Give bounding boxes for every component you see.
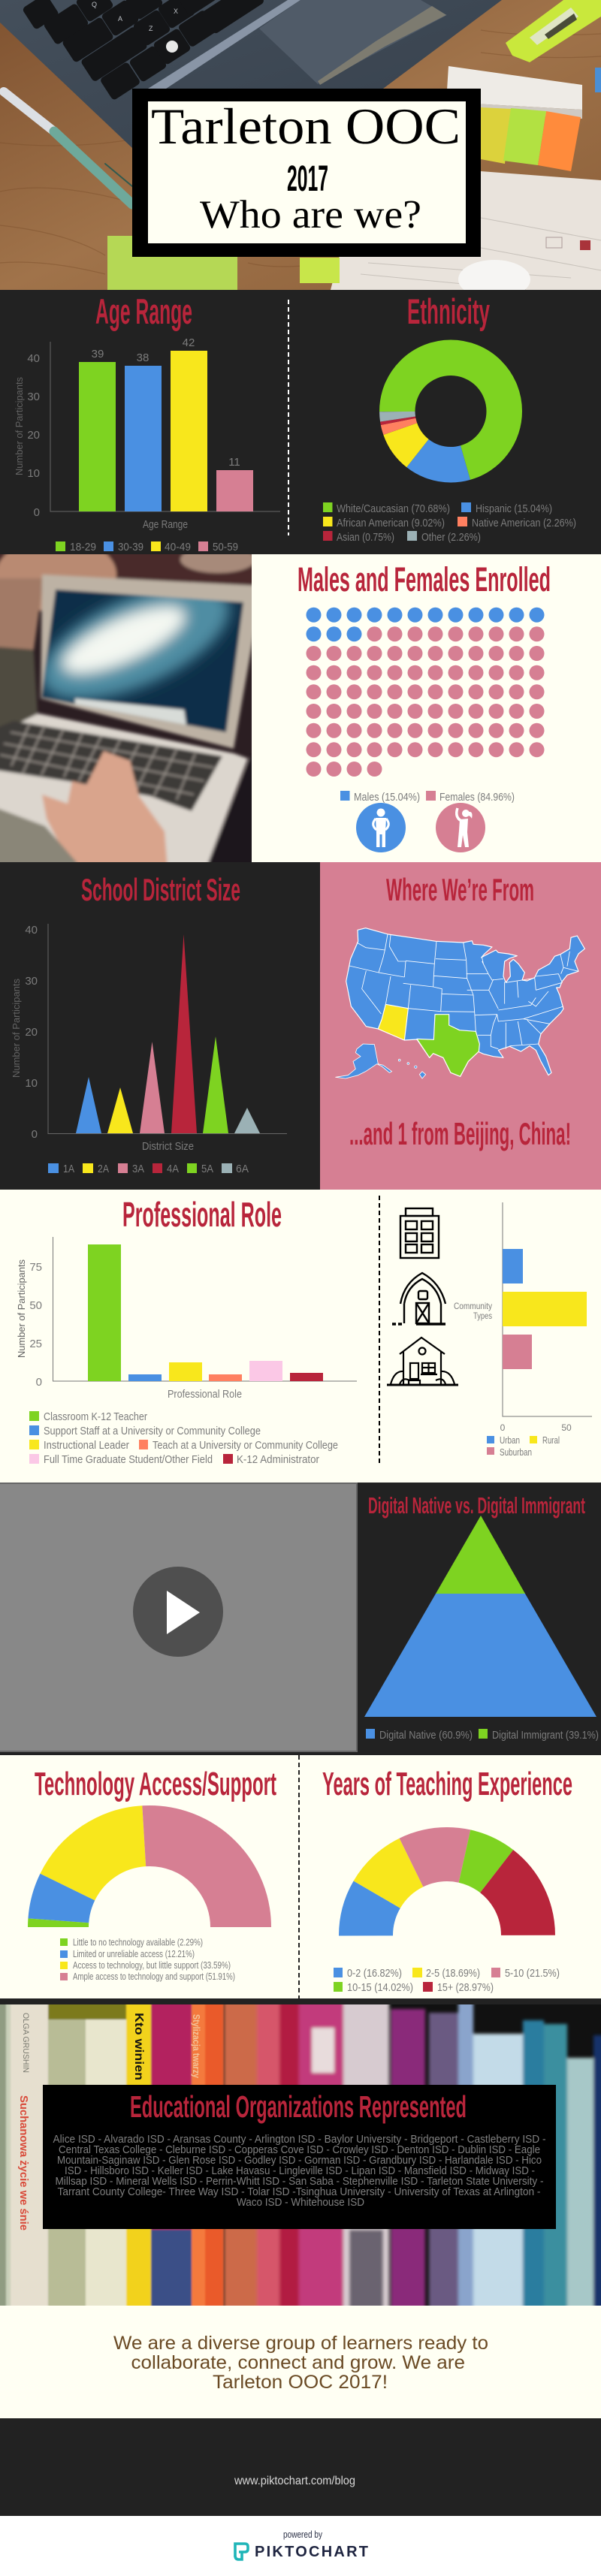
hero: pen bbox=[4, 92, 132, 204]
legend: gender: Females (84.96%) bbox=[439, 791, 515, 804]
legend: ethnicity: Other (2.26%) bbox=[421, 531, 481, 544]
organizations list bbox=[53, 2133, 545, 2209]
hero: notebook and mouse bbox=[331, 171, 601, 299]
panel: footer link bbox=[0, 2418, 601, 2516]
map: United States bbox=[336, 928, 584, 1078]
bar chart: professional role: Number of Participants bbox=[17, 1259, 27, 1358]
bar chart: age range: 20 bbox=[27, 429, 40, 442]
heading: age range: Age Range bbox=[95, 291, 192, 331]
bar chart: community types: Types bbox=[473, 1311, 492, 1321]
bar chart: age range: 40 bbox=[27, 352, 40, 365]
heading: school district size: School District Size bbox=[81, 872, 240, 907]
legend: technology access: Little to no technology available (2.29%) bbox=[73, 1938, 203, 1948]
spine text: OLGA GRUSHIN bbox=[21, 2013, 30, 2073]
legend: age range: 50-59 bbox=[213, 541, 238, 554]
panel: closing statement: Tarleton OOC 2017! bbox=[213, 2372, 388, 2393]
semi-donut: technology access bbox=[59, 1835, 240, 2019]
photo: hands on laptop bbox=[0, 554, 252, 862]
legend: ethnicity: Native American (2.26%) bbox=[472, 517, 576, 529]
legend: district size: 1A bbox=[63, 1163, 74, 1175]
legend: ethnicity: Hispanic (15.04%) bbox=[476, 502, 552, 515]
map: Hawaii bbox=[398, 1059, 426, 1078]
heading: technology access: Technology Access/Support bbox=[35, 1766, 276, 1802]
legend: years of teaching: 0-2 (16.82%) bbox=[347, 1967, 402, 1980]
bar chart: age range: Number of Participants bbox=[14, 377, 25, 475]
legend: years of teaching: 10-15 (14.02%) bbox=[347, 1981, 413, 1994]
map: Arizona bbox=[378, 1004, 408, 1040]
heading: ethnicity: Ethnicity bbox=[407, 291, 490, 331]
legend: professional role bbox=[29, 1410, 338, 1466]
triangle chart: district size: 10 bbox=[25, 1077, 38, 1090]
legend: digital native bbox=[366, 1729, 599, 1742]
dot matrix: gender split bbox=[307, 608, 544, 777]
subtitle: Who are we? bbox=[200, 193, 421, 237]
icon: rural barn bbox=[392, 1273, 445, 1324]
triangle chart: district size: District Size bbox=[142, 1140, 194, 1153]
bar chart: community types: Community bbox=[454, 1301, 492, 1311]
text panel: organizations list bbox=[43, 2085, 556, 2229]
panel: where we're from bbox=[320, 862, 601, 1190]
legend: ethnicity: Asian (0.75%) bbox=[337, 531, 394, 544]
legend: professional role: Teach at a University or Community College bbox=[153, 1439, 338, 1452]
legend: digital native: Digital Native (60.9%) bbox=[379, 1729, 473, 1742]
map: Alaska bbox=[336, 1044, 392, 1078]
icon: urban building bbox=[400, 1208, 439, 1258]
legend: age range bbox=[56, 541, 238, 554]
panel: professional role bbox=[0, 1190, 601, 1483]
legend: gender: Males (15.04%) bbox=[354, 791, 420, 804]
legend: age range: 18-29 bbox=[70, 541, 96, 554]
legend: district size: 4A bbox=[167, 1163, 179, 1175]
triangle chart: district size: 30 bbox=[25, 975, 38, 988]
organizations list: Waco ISD - Whitehouse ISD bbox=[237, 2196, 364, 2209]
hero: laptop: A bbox=[118, 15, 122, 23]
spine text: Suchanowa życie we śnie bbox=[17, 2095, 30, 2231]
hero: sticky tabs bbox=[446, 66, 582, 171]
legend: district size: 3A bbox=[132, 1163, 144, 1175]
icon: piktochart logo bbox=[235, 2544, 248, 2559]
organizations list: Millsap ISD - Mineral Wells ISD - Perrin-Whitt ISD - San Saba - Stephenville ISD - Tarleton State University - bbox=[56, 2175, 544, 2188]
spine text bbox=[17, 2013, 202, 2231]
organizations list: Mountain-Saginaw ISD - Glen Rose ISD - Godley ISD - Gorman ISD - Grandbury ISD - Harlandale ISD - Hico bbox=[57, 2154, 542, 2167]
triangle chart: district size: 0 bbox=[32, 1128, 38, 1141]
legend: community types: Suburban bbox=[500, 1447, 532, 1458]
title line: Tarleton OOC bbox=[151, 98, 461, 155]
bar chart: age range bbox=[14, 336, 280, 531]
legend: technology access: Ample access to technology and support (51.91%) bbox=[73, 1971, 235, 1982]
legend: ethnicity: African American (9.02%) bbox=[337, 517, 445, 529]
legend: community types bbox=[487, 1435, 560, 1458]
panel: school district size bbox=[0, 862, 320, 1190]
organizations list: Alice ISD - Alvarado ISD - Aransas County - Arlington ISD - Baylor University - Bridgeport - Castleberry ISD - bbox=[53, 2133, 545, 2146]
panel: technology and teaching experience bbox=[0, 1755, 601, 2019]
bar chart: age range: 11 bbox=[228, 456, 240, 469]
triangle chart: district size: 40 bbox=[25, 924, 38, 937]
legend: technology access bbox=[60, 1938, 235, 1982]
icon: play button bbox=[133, 1567, 223, 1657]
legend: district size: 5A bbox=[201, 1163, 213, 1175]
organizations list: ISD - Hillsboro ISD - Keller ISD - Lake Havasu - Lingleville ISD - Lipan ISD - Mansfield ISD - Midway ISD - bbox=[65, 2164, 535, 2177]
legend: ethnicity: White/Caucasian (70.68%) bbox=[337, 502, 450, 515]
bar chart: professional role: Professional Role bbox=[168, 1388, 242, 1401]
legend: technology access: Access to technology, but little support (33.59%) bbox=[73, 1960, 231, 1971]
panel: piktochart branding bbox=[0, 2516, 601, 2576]
hero: sticky notes bbox=[107, 236, 340, 290]
organizations list: Tarrant County College- Three Way ISD - Tolar ISD -Tsinghua University - University of Texas at Arlington - bbox=[57, 2185, 541, 2198]
panel: piktochart branding: PIKTOCHART bbox=[255, 2544, 368, 2560]
panel: closing statement: collaborate, connect and grow. We are bbox=[131, 2352, 465, 2373]
hero: laptop: X bbox=[174, 8, 178, 15]
hero: highlighter bbox=[506, 0, 601, 92]
panel: educational organizations bbox=[0, 1990, 601, 2321]
bar chart: professional role bbox=[17, 1237, 357, 1401]
icon: female figure bbox=[436, 803, 485, 852]
bar chart: professional role: 0 bbox=[36, 1376, 42, 1389]
legend: years of teaching bbox=[334, 1967, 560, 1994]
legend: years of teaching: 2-5 (18.69%) bbox=[426, 1967, 480, 1980]
title card bbox=[132, 89, 481, 257]
bar chart: age range: 30 bbox=[27, 391, 40, 403]
triangle chart: district size bbox=[11, 924, 287, 1153]
panel: age range and ethnicity bbox=[0, 290, 601, 554]
hero: laptop: Q bbox=[92, 1, 97, 8]
legend: professional role: K-12 Administrator bbox=[237, 1453, 319, 1466]
bar chart: age range: 10 bbox=[27, 467, 40, 480]
legend: community types: Urban bbox=[500, 1435, 520, 1446]
bar chart: age range: 42 bbox=[183, 336, 195, 349]
video placeholder bbox=[0, 1483, 357, 1751]
semi-donut: years of teaching bbox=[366, 1854, 528, 2016]
legend: professional role: Support Staff at a University or Community College bbox=[44, 1425, 261, 1437]
panel: video and digital native bbox=[0, 1483, 601, 1755]
bar chart: community types bbox=[454, 1202, 592, 1433]
year: 2017 bbox=[287, 159, 328, 199]
panel: males and females enrolled bbox=[252, 554, 601, 862]
photo: bookshelf bbox=[0, 1990, 601, 2321]
map: Texas bbox=[417, 1015, 479, 1076]
bar chart: professional role: 75 bbox=[29, 1261, 42, 1274]
bar chart: age range: 39 bbox=[92, 348, 104, 360]
legend: professional role: Classroom K-12 Teacher bbox=[44, 1410, 147, 1423]
organizations list: Central Texas College - Cleburne ISD - Copperas Cove ISD - Crowley ISD - Denton ISD - Dublin ISD - Eagle bbox=[59, 2143, 540, 2156]
bar chart: community types: 0 bbox=[500, 1422, 506, 1433]
legend: age range: 30-39 bbox=[118, 541, 143, 554]
bar chart: professional role: 25 bbox=[29, 1338, 42, 1350]
legend: district size: 2A bbox=[98, 1163, 109, 1175]
triangle chart: district size: 20 bbox=[25, 1026, 38, 1039]
panel: closing statement bbox=[0, 2306, 601, 2418]
hero: laptop bbox=[0, 0, 502, 180]
donut chart: ethnicity bbox=[397, 357, 504, 465]
panel: footer link: www.piktochart.com/blog bbox=[234, 2475, 355, 2487]
bar chart: community types: 50 bbox=[561, 1422, 572, 1433]
pyramid chart bbox=[364, 1516, 596, 1717]
bar chart: professional role: 50 bbox=[29, 1299, 42, 1312]
legend: district size: 6A bbox=[236, 1163, 249, 1175]
icon: suburban house bbox=[387, 1338, 458, 1385]
legend: district size bbox=[48, 1163, 249, 1175]
heading: professional role: Professional Role bbox=[122, 1195, 282, 1234]
legend: gender bbox=[340, 791, 515, 804]
triangle chart: district size: Number of Participants bbox=[11, 979, 22, 1078]
spine text: Stylizacja twarzy bbox=[191, 2014, 202, 2079]
hero: laptop: Z bbox=[149, 25, 153, 32]
legend: years of teaching: 15+ (28.97%) bbox=[437, 1981, 494, 1994]
bar chart: age range: Age Range bbox=[143, 518, 188, 531]
panel: closing statement: We are a diverse group of learners ready to bbox=[113, 2333, 488, 2354]
icon: male figure bbox=[356, 803, 406, 852]
legend: professional role: Instructional Leader bbox=[44, 1439, 129, 1452]
bar chart: age range: 0 bbox=[34, 506, 40, 519]
legend: years of teaching: 5-10 (21.5%) bbox=[505, 1967, 560, 1980]
panel: piktochart branding: powered by bbox=[283, 2529, 323, 2540]
legend: age range: 40-49 bbox=[165, 541, 191, 554]
hero: desk photo with title card bbox=[0, 0, 601, 299]
legend: technology access: Limited or unreliable access (12.21%) bbox=[73, 1949, 195, 1959]
legend: ethnicity bbox=[323, 502, 576, 544]
spine text: Kto winien bbox=[132, 2013, 145, 2080]
bar chart: age range: 38 bbox=[137, 351, 149, 364]
legend: professional role: Full Time Graduate Student/Other Field bbox=[44, 1453, 213, 1466]
legend: community types: Rural bbox=[542, 1435, 560, 1446]
